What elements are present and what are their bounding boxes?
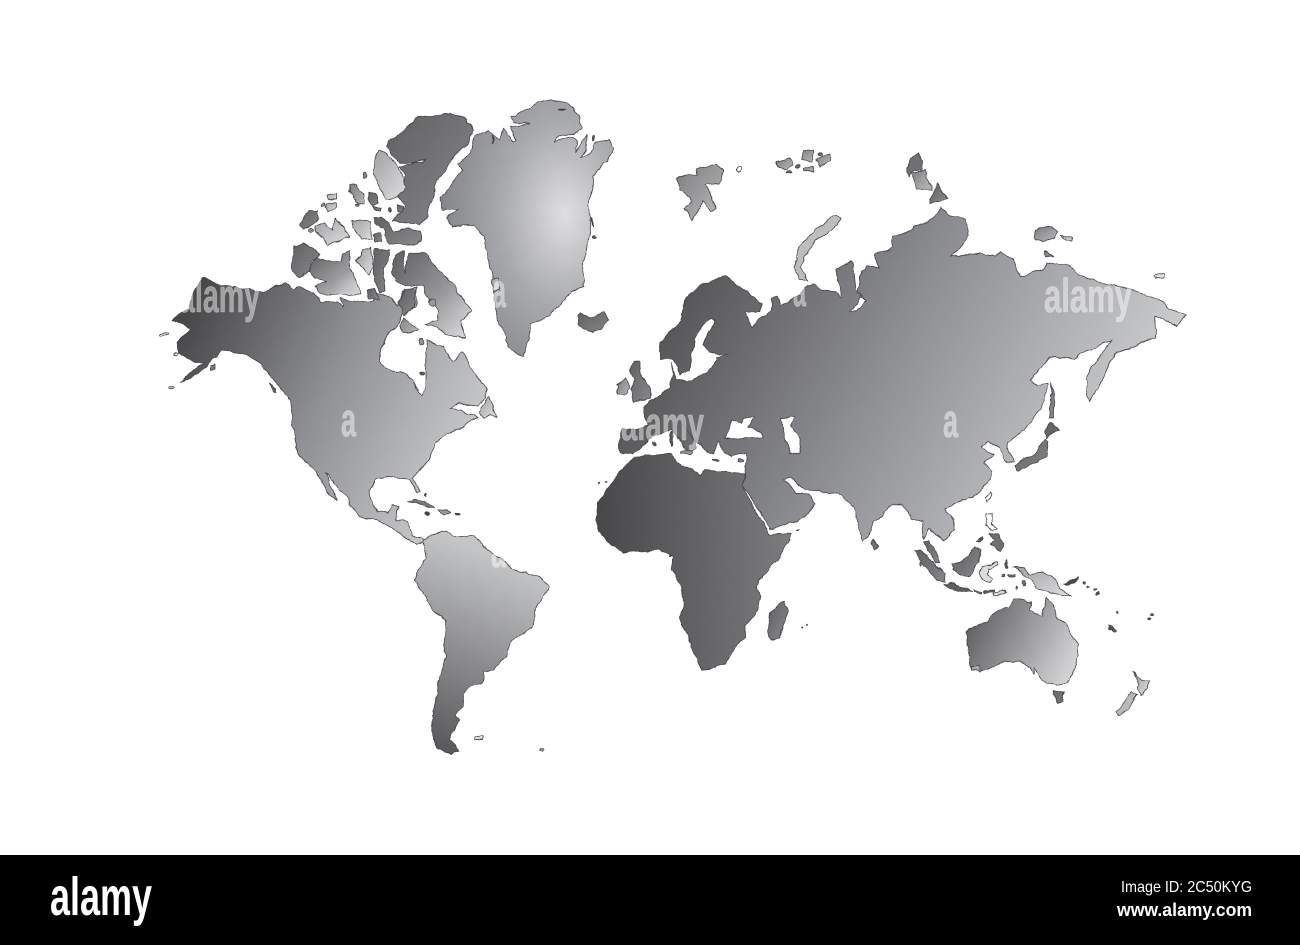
image id: Image ID: 2C50KYG bbox=[1121, 879, 1252, 896]
island: Honshu bbox=[1015, 438, 1049, 472]
islands: Mediterranean bbox=[652, 432, 743, 462]
island: Sri Lanka bbox=[871, 539, 877, 550]
sea: Black Sea bbox=[725, 417, 764, 440]
island: Palawan bbox=[977, 536, 983, 543]
island: Cuba bbox=[407, 499, 435, 508]
island: New Britain bbox=[1064, 578, 1077, 585]
watermark text on the map: a bbox=[793, 263, 806, 316]
watermark text on the map: a bbox=[943, 394, 958, 447]
land: Eurasia group bbox=[617, 150, 1186, 543]
watermark remnant on Australia bbox=[971, 666, 979, 672]
land: Australia bbox=[966, 597, 1079, 686]
islands: Lesser Sunda bbox=[973, 590, 1005, 597]
watermark text on the map: a bbox=[341, 393, 356, 446]
island: Sakhalin bbox=[1049, 383, 1054, 418]
island: Arctic islands group bbox=[291, 185, 422, 334]
island: Ellesmere bbox=[387, 113, 473, 224]
land masses bbox=[161, 99, 1186, 755]
islands: Franz Josef Land bbox=[736, 150, 831, 173]
island: New Zealand North bbox=[1134, 671, 1149, 696]
island: Disko bbox=[492, 277, 500, 292]
island: Madagascar bbox=[768, 602, 788, 640]
island: Ireland bbox=[617, 378, 630, 395]
islands: Alaska coast bbox=[161, 110, 596, 393]
island: Hokkaido bbox=[1045, 423, 1060, 437]
island: Baffin bbox=[392, 252, 472, 338]
logo: alamy: alamy bbox=[50, 867, 152, 927]
island: Iceland bbox=[577, 313, 608, 334]
island: New Caledonia bbox=[1109, 625, 1117, 632]
island: Sulawesi bbox=[981, 563, 998, 582]
islands: Atlantic and Indian dots bbox=[598, 482, 809, 628]
watermark text on the map: alamy bbox=[1044, 269, 1132, 322]
watermark text on the map bbox=[179, 263, 1132, 577]
sea: Caspian bbox=[781, 417, 800, 453]
website url: www.alamy.com bbox=[1116, 900, 1252, 920]
island: Luzon bbox=[985, 513, 997, 530]
island: Halmahera bbox=[1005, 560, 1009, 568]
island: New Zealand South bbox=[1116, 692, 1137, 716]
islands: New Siberian bbox=[1035, 226, 1164, 278]
watermark text on the map: alamy bbox=[621, 397, 704, 450]
island: Caribbean small bbox=[424, 493, 544, 751]
island: Borneo bbox=[953, 548, 981, 578]
island: Axel Heiberg bbox=[373, 150, 405, 200]
island: Java bbox=[944, 583, 972, 592]
island: Hispaniola bbox=[438, 509, 452, 515]
islands: Severnaya Zemlya bbox=[906, 151, 946, 202]
islands: Pacific small bbox=[920, 562, 1153, 618]
island: Mindanao bbox=[990, 533, 1003, 550]
land: Southeast Asia and Oceania group bbox=[871, 492, 1153, 716]
island: Greenland bbox=[440, 99, 613, 355]
watermark text on the map: alamy bbox=[179, 269, 260, 322]
land: Canadian Arctic and Greenland group bbox=[161, 99, 613, 418]
land: Malay Peninsula bbox=[923, 540, 940, 562]
island: Svalbard bbox=[677, 165, 723, 220]
island: Taiwan bbox=[985, 492, 991, 503]
island: Britain bbox=[629, 362, 650, 402]
island: Sumatra bbox=[915, 552, 946, 582]
land: Eurasia bbox=[619, 208, 1186, 543]
footer bar bbox=[0, 855, 1300, 945]
land: North America bbox=[172, 277, 488, 545]
island: Newfoundland bbox=[478, 397, 497, 418]
land: South America and Caribbean bbox=[407, 493, 548, 755]
watermark text on the map: a bbox=[492, 264, 506, 317]
land: Africa bbox=[597, 453, 791, 671]
land: Africa group bbox=[597, 453, 809, 671]
island: New Guinea bbox=[1014, 567, 1071, 597]
island: Seram bbox=[1008, 575, 1015, 577]
land: South America bbox=[416, 532, 548, 755]
island: Falklands bbox=[474, 735, 482, 739]
island: Novaya Zemlya bbox=[792, 217, 843, 282]
watermark text on the map: a bbox=[491, 524, 506, 577]
island: Tasmania bbox=[1054, 692, 1064, 703]
